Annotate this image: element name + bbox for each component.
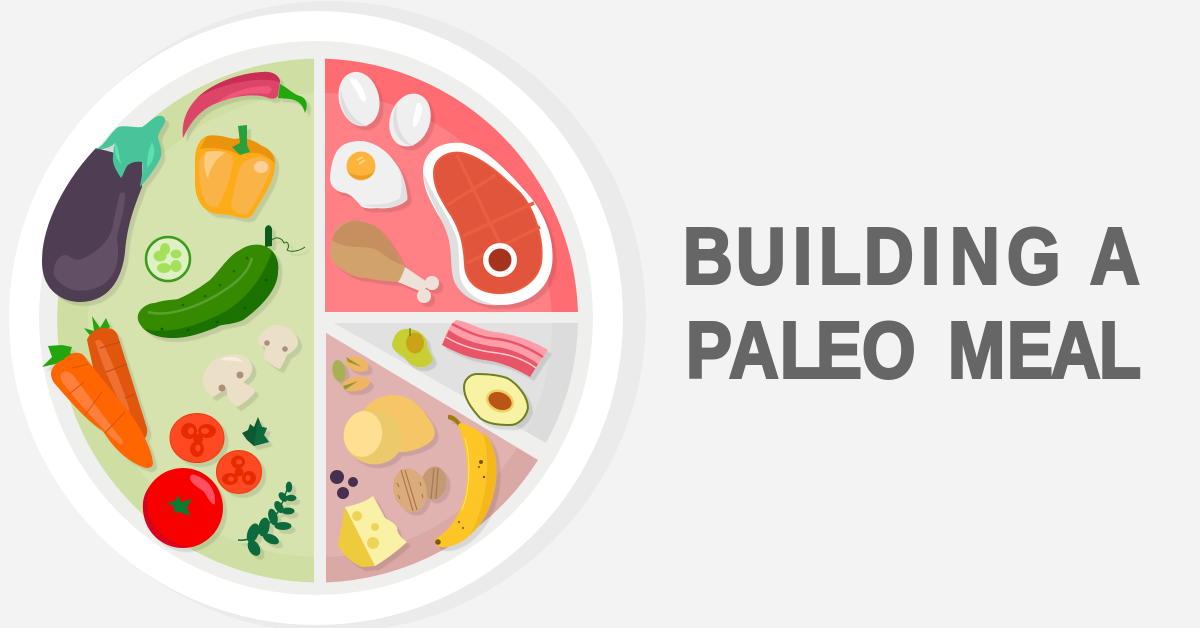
panel: fats section	[334, 323, 578, 443]
icon: eggs	[333, 67, 437, 152]
panel: carbs section	[326, 333, 538, 582]
icon: cucumber	[138, 225, 305, 338]
icon: bacon	[442, 320, 548, 377]
icon: steak	[423, 143, 553, 305]
icon: banana	[435, 415, 496, 547]
icon: whole tomato	[143, 468, 223, 548]
plate	[9, 1, 646, 628]
icon: blueberries	[330, 470, 358, 499]
title: BUILDING A	[683, 211, 1140, 301]
icon: potatoes	[337, 395, 435, 471]
icon: chicken drumstick	[330, 221, 439, 303]
icon: yellow bell pepper	[195, 125, 275, 218]
panel: vegetables section	[57, 58, 314, 582]
icon: parsley leaf	[242, 417, 269, 446]
title	[683, 211, 1141, 395]
icon: olive	[392, 328, 433, 367]
icon: avocado	[464, 374, 528, 425]
icon: cucumber slice	[146, 237, 190, 281]
panel: protein section	[325, 58, 578, 312]
icon: herb sprig	[238, 482, 296, 558]
icon: mushrooms	[203, 325, 298, 407]
icon: pistachios	[331, 353, 371, 393]
icon: tomato slices	[170, 414, 262, 494]
icon: walnuts	[389, 465, 449, 515]
icon: eggplant	[42, 116, 165, 302]
icon: chili pepper	[183, 72, 307, 138]
title: PALEO MEAL	[686, 305, 1141, 395]
icon: fried egg	[330, 141, 407, 208]
icon: cheese	[338, 496, 407, 567]
icon: carrots	[42, 316, 153, 468]
